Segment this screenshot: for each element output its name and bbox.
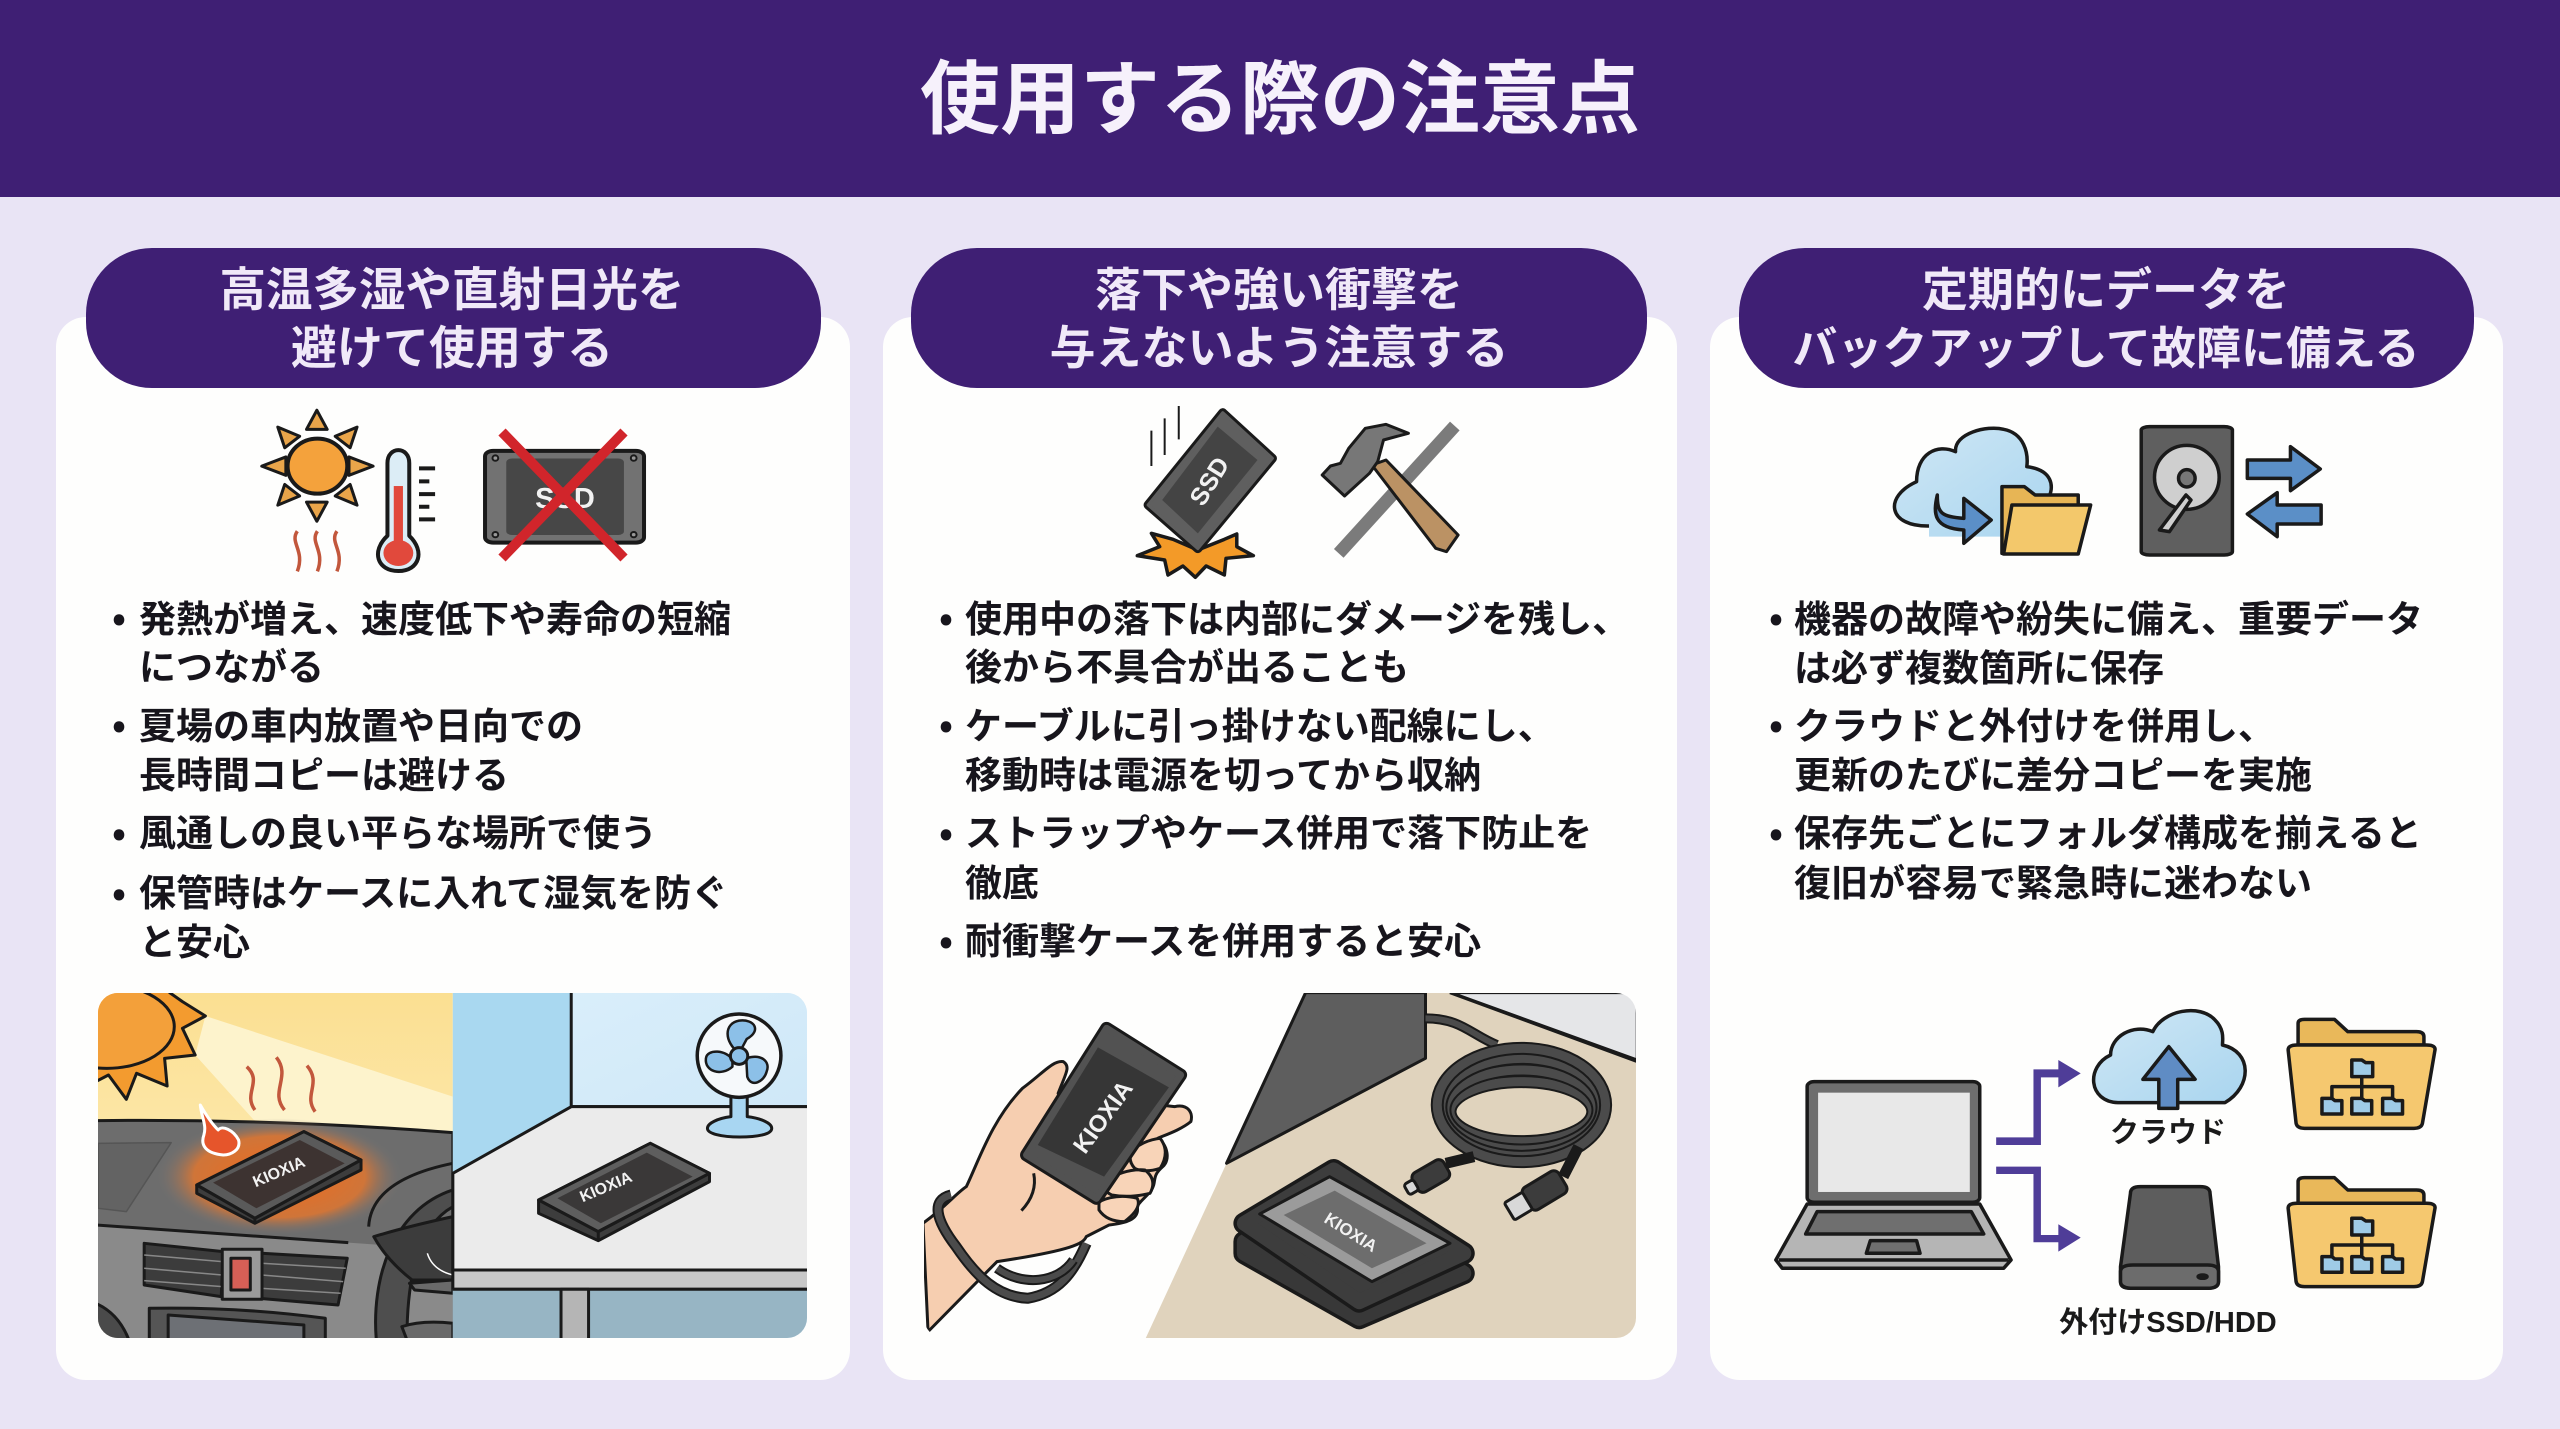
bullet list: につながる xyxy=(139,637,324,691)
bullet list: 使用中の落下は内部にダメージを残し、 xyxy=(965,589,1629,643)
card background xyxy=(1710,317,2503,1380)
icon: hammer with slash xyxy=(1322,424,1458,553)
icon: crossed out SSD: SSD xyxy=(535,483,595,515)
bullet list: • xyxy=(1769,803,1783,857)
bullet list: ケーブルに引っ掛けない配線にし、 xyxy=(965,696,1555,750)
bullet list: • xyxy=(1769,588,1783,642)
heading pill: 定期的にデータを xyxy=(1922,254,2290,320)
bullet list: • xyxy=(112,803,126,857)
bullet list: • xyxy=(112,695,126,749)
heading pill: 落下や強い衝撃を xyxy=(1095,254,1463,320)
bullet list: クラウドと外付けを併用し、 xyxy=(1794,696,2275,750)
arrow to cloud xyxy=(1996,1060,2081,1145)
bullet list: 耐衝撃ケースを併用すると安心 xyxy=(965,911,1481,965)
bullet list: 風通しの良い平らな場所で使う xyxy=(139,803,657,857)
bullet list: 発熱が増え、速度低下や寿命の短縮 xyxy=(139,589,731,643)
heading pill xyxy=(1739,248,2474,388)
bullet list: 後から不具合が出ることも xyxy=(965,637,1409,691)
illustration: hot car dashboard versus ventilated desk: KIOXIA xyxy=(251,1154,308,1191)
bullet list: • xyxy=(939,588,953,642)
bullet list: • xyxy=(112,588,126,642)
icon: sun and thermometer xyxy=(262,410,435,571)
label: cloud: クラウド xyxy=(2110,1109,2226,1151)
bullet list: 機器の故障や紛失に備え、重要データ xyxy=(1794,589,2423,643)
illustration: wrist strap and rugged case: KIOXIA xyxy=(1068,1076,1139,1159)
external drive xyxy=(2121,1187,2218,1288)
title banner: 使用する際の注意点 xyxy=(920,35,1640,151)
bullet list: 長時間コピーは避ける xyxy=(139,745,509,799)
bullet list: • xyxy=(939,803,953,857)
arrow to drive xyxy=(1996,1167,2081,1252)
illustration: hot car dashboard versus ventilated desk: KIOXIA xyxy=(578,1169,635,1206)
bullet list: • xyxy=(1769,695,1783,749)
bullet list: 復旧が容易で緊急時に迷わない xyxy=(1794,853,2312,907)
bullet list: ストラップやケース併用で落下防止を xyxy=(965,803,1592,857)
illustration: wrist strap and rugged case: KIOXIA xyxy=(1321,1209,1381,1256)
bullet list: と安心 xyxy=(139,912,250,966)
panel: heat and sunlight xyxy=(40,248,850,1380)
bullet list: 更新のたびに差分コピーを実施 xyxy=(1794,745,2312,799)
bullet list: は必ず複数箇所に保存 xyxy=(1794,638,2164,692)
label: external drive: 外付けSSD/HDD xyxy=(2059,1306,2277,1339)
folder with tree, bottom xyxy=(2288,1178,2435,1287)
cloud xyxy=(2094,1011,2245,1108)
heading pill: 高温多湿や直射日光を xyxy=(220,253,684,320)
bullet list: 夏場の車内放置や日向での xyxy=(139,696,583,750)
card background xyxy=(56,317,850,1380)
bullet list xyxy=(939,588,1629,965)
panel: backup xyxy=(1710,248,2503,1380)
folder with tree, top xyxy=(2288,1019,2435,1128)
icon: falling SSD: SSD xyxy=(1184,452,1235,511)
icon: falling SSD xyxy=(1137,406,1272,577)
bullet list: 移動時は電源を切ってから収納 xyxy=(965,745,1481,799)
bullet list: • xyxy=(939,911,953,965)
bullet list: • xyxy=(939,695,953,749)
title banner xyxy=(0,0,2560,197)
heading pill: 与えないよう注意する xyxy=(1049,312,1509,378)
laptop xyxy=(1776,1082,2011,1268)
heading pill xyxy=(911,248,1647,388)
cable connectors xyxy=(1404,1157,1569,1220)
icon: cloud with folder xyxy=(1894,428,2091,554)
icon: crossed out SSD xyxy=(485,432,644,558)
bullet list: • xyxy=(112,863,126,917)
bullet list xyxy=(112,588,731,966)
heading pill: バックアップして故障に備える xyxy=(1792,312,2420,377)
icon: hard disk with arrows xyxy=(2141,427,2321,555)
panel: drops and impact xyxy=(883,248,1677,1380)
bullet list: 徹底 xyxy=(965,853,1039,907)
diagram: laptop backing up to cloud and external drive xyxy=(1776,1011,2435,1339)
card background xyxy=(883,317,1677,1380)
illustration: hot car dashboard versus ventilated desk xyxy=(98,993,807,1338)
illustration: wrist strap and rugged case xyxy=(923,993,1637,1340)
heading pill: 避けて使用する xyxy=(291,312,613,378)
bullet list: 保存先ごとにフォルダ構成を揃えると xyxy=(1794,803,2422,857)
bullet list xyxy=(1769,588,2423,907)
heading pill xyxy=(86,248,821,388)
bullet list: 保管時はケースに入れて湿気を防ぐ xyxy=(139,863,728,917)
